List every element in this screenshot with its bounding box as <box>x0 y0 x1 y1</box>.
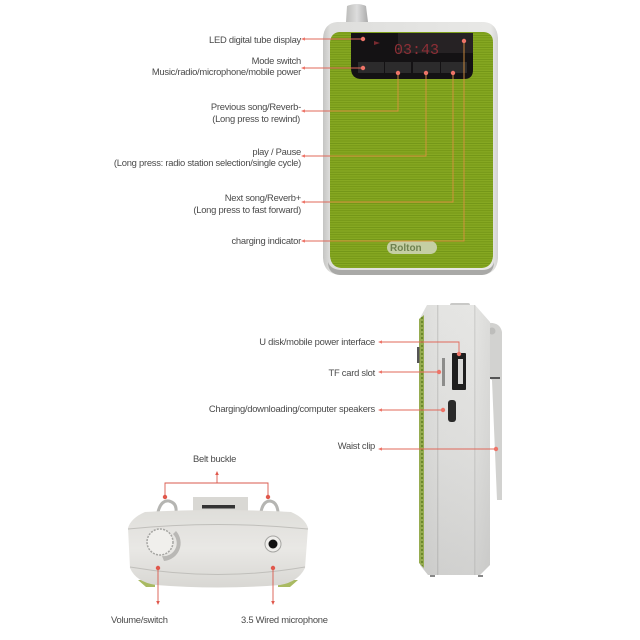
front speaker mesh <box>330 32 493 268</box>
front labels: (Long press to rewind) <box>212 113 300 124</box>
clock digits: 03:43 <box>394 42 439 59</box>
bottom callout markers <box>156 471 275 605</box>
body lips <box>128 524 308 574</box>
volume knob <box>147 529 181 561</box>
front view device <box>323 4 498 275</box>
front labels: Next song/Reverb+ <box>225 192 302 203</box>
bottom labels: 3.5 Wired microphone <box>241 614 328 625</box>
front labels: Mode switch <box>252 55 301 66</box>
front labels: play / Pause <box>252 146 301 157</box>
side callout dots <box>378 340 498 451</box>
front labels: Music/radio/microphone/mobile power <box>152 66 301 77</box>
display panel <box>351 33 473 79</box>
logo badge: Rolton <box>390 243 422 254</box>
front callout lines <box>305 39 363 241</box>
front labels <box>114 34 302 246</box>
side top button <box>450 303 470 307</box>
side labels: Charging/downloading/computer speakers <box>209 403 376 414</box>
side labels: Waist clip <box>338 440 375 451</box>
side view device <box>417 303 502 577</box>
logo badge <box>387 241 437 254</box>
bottom view device <box>128 497 308 588</box>
play mark <box>374 41 380 45</box>
front callout lines over mesh <box>330 41 464 241</box>
microphone jack <box>265 536 281 552</box>
front body <box>323 22 498 275</box>
front knob <box>346 4 368 22</box>
side mesh strip <box>419 315 424 568</box>
side labels <box>209 336 376 451</box>
side callout lines <box>379 342 496 449</box>
bottom body <box>128 510 308 588</box>
bottom labels: Belt buckle <box>193 453 236 464</box>
side body <box>420 305 490 575</box>
front labels: Previous song/Reverb- <box>211 101 301 112</box>
usb port <box>452 353 466 390</box>
tf card slot <box>442 358 445 386</box>
micro usb port <box>448 400 456 422</box>
front labels: (Long press to fast forward) <box>193 204 301 215</box>
green edges <box>138 580 298 587</box>
side clip <box>488 323 502 500</box>
front labels: charging indicator <box>231 235 301 246</box>
belt loops <box>158 501 176 512</box>
bottom callout lines <box>158 474 273 603</box>
front labels: (Long press: radio station selection/single cycle) <box>114 157 301 168</box>
side feet <box>430 575 483 577</box>
bottom labels <box>111 453 328 625</box>
bottom labels: Volume/switch <box>111 614 168 625</box>
clip block <box>193 497 248 512</box>
side labels: U disk/mobile power interface <box>259 336 375 347</box>
front callout dots <box>301 37 466 243</box>
side labels: TF card slot <box>328 367 376 378</box>
front labels: LED digital tube display <box>209 34 302 45</box>
